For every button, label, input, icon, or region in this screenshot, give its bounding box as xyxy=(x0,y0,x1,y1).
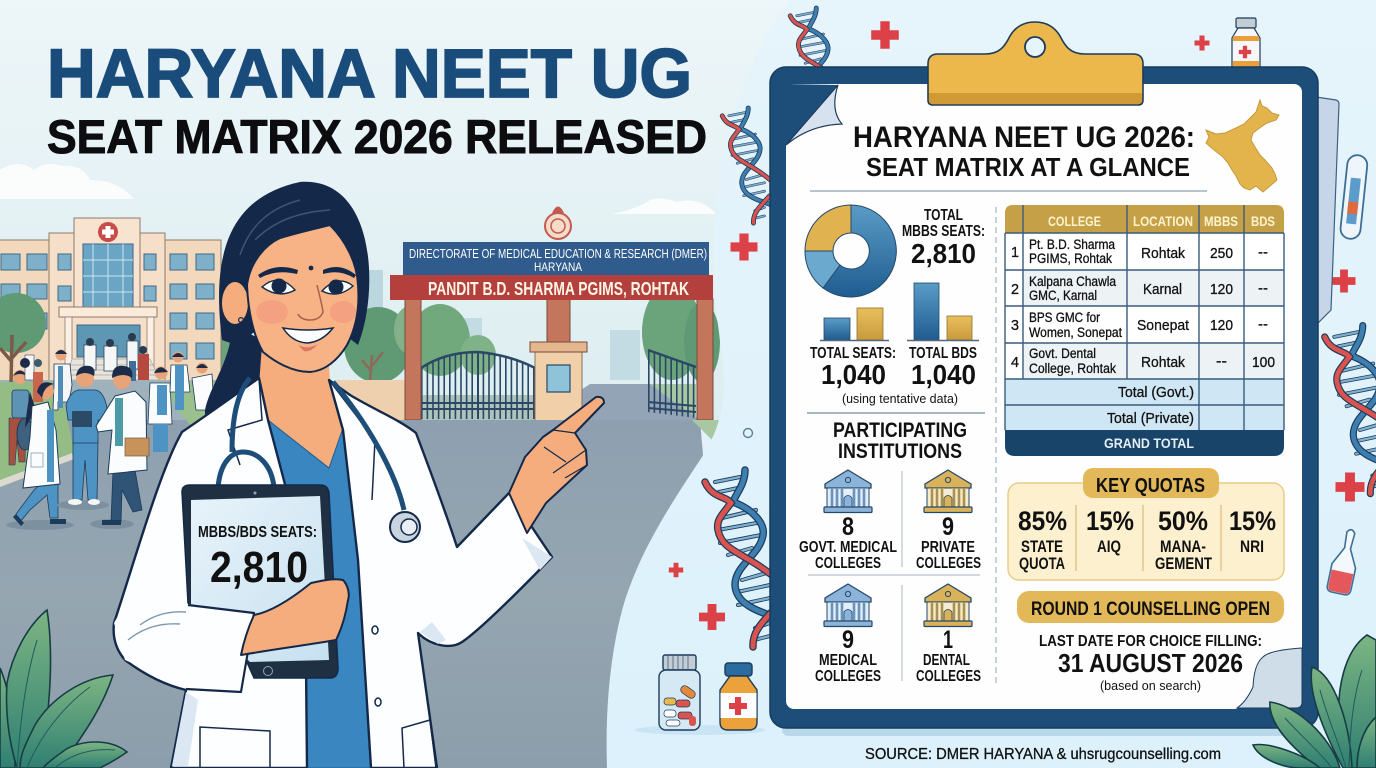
source line: SOURCE: DMER HARYANA & uhsrugcounselling.com xyxy=(865,746,1221,763)
decorative DNA strands xyxy=(705,8,1376,647)
row 3: Women, Sonepat xyxy=(1029,325,1122,340)
hair xyxy=(219,182,369,345)
icon: emblem xyxy=(545,206,571,239)
seat matrix table xyxy=(1005,205,1284,456)
bar chart: total BDS xyxy=(907,283,979,340)
row 4 xyxy=(1011,346,1275,376)
pointing hand xyxy=(509,397,604,533)
background trees and distant buildings xyxy=(200,270,720,383)
row 1: PGIMS, Rohtak xyxy=(1029,251,1112,266)
clipboard panel xyxy=(770,22,1339,736)
item: dental colleges xyxy=(916,584,981,685)
item: private colleges: COLLEGES xyxy=(916,555,981,572)
quota: NRI: NRI xyxy=(1240,537,1264,556)
lawn and tree xyxy=(0,293,46,385)
quota: management: 50% xyxy=(1158,506,1208,536)
row 4: 4 xyxy=(1011,354,1019,371)
grass strips xyxy=(0,382,726,487)
stat: total MBBS seats: MBBS SEATS: xyxy=(902,223,985,240)
last date xyxy=(1039,633,1262,693)
doctor character xyxy=(114,182,604,768)
table header: BDS xyxy=(1251,213,1275,229)
tentative note: (using tentative data) xyxy=(842,392,958,406)
sign: institute xyxy=(390,275,713,300)
left sleeve over tablet xyxy=(114,560,254,692)
row 3: Sonepat xyxy=(1137,317,1190,334)
row 2: Karnal xyxy=(1143,281,1182,298)
quotas heading xyxy=(1083,468,1219,498)
neck and chest xyxy=(259,345,345,470)
icon: medicine bottle xyxy=(720,663,757,730)
background student left xyxy=(9,355,43,465)
row 3: -- xyxy=(1258,316,1268,333)
quota: NRI xyxy=(1229,506,1276,556)
cheeks xyxy=(256,300,356,324)
item: private colleges: PRIVATE xyxy=(921,539,975,556)
row 1: 1 xyxy=(1011,244,1019,261)
background doctor xyxy=(53,350,72,410)
row 1: Rohtak xyxy=(1141,245,1185,262)
quota: management: MANA- xyxy=(1160,537,1206,556)
title line 2: SEAT MATRIX 2026 RELEASED xyxy=(47,110,707,163)
pillars xyxy=(405,299,713,420)
left hand xyxy=(241,579,349,655)
background group right xyxy=(148,352,214,452)
crowd of medical students xyxy=(6,333,214,530)
eyes and brows xyxy=(258,266,356,294)
item: private colleges: 9 xyxy=(942,513,954,541)
table backgrounds xyxy=(1005,205,1284,456)
extra sheet behind board xyxy=(1316,97,1339,325)
sky background xyxy=(0,0,1376,430)
last date: (based on search) xyxy=(1100,679,1201,693)
smile xyxy=(283,328,333,351)
bar chart: total seats xyxy=(820,308,889,340)
row 3: 3 xyxy=(1011,317,1019,334)
row 4: Govt. Dental xyxy=(1029,346,1096,361)
row 2: -- xyxy=(1258,280,1268,297)
participating institutions xyxy=(799,419,981,685)
woman with phone xyxy=(6,382,74,530)
clouds xyxy=(0,164,716,214)
panel heading: SEAT MATRIX AT A GLANCE xyxy=(866,152,1190,182)
totals: GRAND TOTAL xyxy=(1104,435,1194,451)
row 1: Pt. B.D. Sharma xyxy=(1029,237,1115,252)
quota: state xyxy=(1018,506,1067,573)
stat: total seats: TOTAL SEATS: xyxy=(810,345,896,362)
figures on the steps xyxy=(84,333,149,381)
row 2: Kalpana Chawla xyxy=(1029,274,1116,289)
icon: Haryana map xyxy=(1206,100,1279,192)
item: government medical colleges xyxy=(799,470,897,572)
tablet number: 2,810 xyxy=(210,543,308,592)
red crosses xyxy=(669,21,1364,630)
ponytail xyxy=(205,325,264,421)
sign: institute: PANDIT B.D. SHARMA PGIMS, ROHTAK xyxy=(428,279,689,299)
institutions heading xyxy=(833,419,967,463)
road ground xyxy=(0,420,730,768)
paper sheet xyxy=(786,84,1302,709)
counselling banner xyxy=(1017,591,1284,623)
title line 1: HARYANA NEET UG xyxy=(47,35,692,112)
gate with signboard xyxy=(335,206,713,421)
shadow under board xyxy=(782,724,1302,736)
page curl: top left xyxy=(786,84,842,145)
tablet xyxy=(182,485,338,678)
plant: bottom left xyxy=(0,610,127,768)
totals xyxy=(1104,385,1194,451)
row 2 xyxy=(1011,274,1268,303)
institutions heading: PARTICIPATING xyxy=(833,419,967,442)
stat: total BDS: TOTAL BDS xyxy=(909,345,977,362)
donut chart xyxy=(805,205,896,297)
stethoscope xyxy=(218,378,420,542)
guard post xyxy=(530,342,587,421)
gold clip xyxy=(928,22,1143,105)
table header: COLLEGE xyxy=(1048,213,1101,229)
row 3: 120 xyxy=(1210,317,1233,334)
quota: state: STATE xyxy=(1021,537,1063,556)
icon: hospital cross xyxy=(98,222,118,242)
decorative blue curved panel xyxy=(607,0,1376,768)
row 2: GMC, Karnal xyxy=(1029,288,1097,303)
last date: LAST DATE FOR CHOICE FILLING: xyxy=(1039,633,1262,650)
stat: total seats xyxy=(810,345,896,390)
stat: total MBBS seats: TOTAL xyxy=(924,207,963,224)
row 1 xyxy=(1011,237,1268,266)
title xyxy=(47,35,707,163)
nose xyxy=(298,285,323,320)
item: dental colleges: COLLEGES xyxy=(916,668,981,685)
item: medical colleges xyxy=(815,584,881,685)
item: government medical colleges: 8 xyxy=(842,513,854,541)
icon: pill bottle xyxy=(635,655,765,735)
gate: left leaf xyxy=(421,352,536,419)
plant: bottom right xyxy=(1253,635,1376,768)
stat: total seats: 1,040 xyxy=(821,359,886,390)
doctor with folder xyxy=(90,366,149,529)
row 4: 100 xyxy=(1252,354,1275,371)
road beyond the gate xyxy=(421,384,700,420)
quota: state: 85% xyxy=(1018,506,1067,536)
table header xyxy=(1048,213,1275,229)
stat: total MBBS seats xyxy=(902,207,985,269)
quota: management xyxy=(1155,506,1212,573)
hospital building xyxy=(0,218,225,420)
stat: total MBBS seats: 2,810 xyxy=(911,238,976,269)
coat left panel xyxy=(114,378,307,768)
quotas heading: KEY QUOTAS xyxy=(1096,475,1205,497)
quota: AIQ: 15% xyxy=(1086,506,1134,536)
row 1: 250 xyxy=(1210,245,1233,262)
row 4: College, Rohtak xyxy=(1029,361,1116,376)
lapels and pockets xyxy=(200,378,436,768)
item: medical colleges: COLLEGES xyxy=(815,668,881,685)
institutions heading: INSTITUTIONS xyxy=(838,440,962,463)
ear xyxy=(221,281,249,325)
row 4: Rohtak xyxy=(1141,354,1185,371)
tablet label: MBBS/BDS SEATS: xyxy=(198,524,317,541)
sign: directorate: HARYANA xyxy=(534,260,582,274)
quota: management: GEMENT xyxy=(1155,554,1212,573)
scrub top xyxy=(268,420,372,768)
icon: ampoule xyxy=(1326,527,1363,596)
quota: NRI: 15% xyxy=(1229,506,1276,536)
white coat xyxy=(114,378,552,768)
item: dental colleges: 1 xyxy=(943,626,953,654)
row 2: 120 xyxy=(1210,281,1233,298)
row 4: -- xyxy=(1216,353,1227,370)
student in scrubs xyxy=(57,366,109,510)
icon: test tube xyxy=(1340,154,1368,240)
table header: LOCATION xyxy=(1133,213,1193,229)
stat: total BDS: 1,040 xyxy=(911,359,976,390)
row 1: -- xyxy=(1258,244,1268,261)
quota: AIQ: AIQ xyxy=(1097,537,1121,556)
coat right panel xyxy=(329,380,552,768)
key quotas panel xyxy=(1008,468,1284,580)
row 2: 2 xyxy=(1011,281,1019,298)
icon: top vial xyxy=(1232,18,1260,67)
page curl: bottom right xyxy=(1237,648,1302,709)
gate: right leaf xyxy=(648,385,697,412)
item: dental colleges: DENTAL xyxy=(923,652,970,669)
quota: state: QUOTA xyxy=(1019,554,1065,573)
panel heading: HARYANA NEET UG 2026: xyxy=(853,121,1195,154)
counselling banner: ROUND 1 COUNSELLING OPEN xyxy=(1031,599,1270,620)
panel heading xyxy=(853,121,1195,182)
item: government medical colleges: GOVT. MEDICAL xyxy=(799,539,897,556)
perimeter wall xyxy=(335,380,405,420)
totals: Total (Govt.) xyxy=(1118,385,1194,401)
item: private colleges xyxy=(916,470,981,572)
stat: total BDS xyxy=(909,345,977,390)
quota: AIQ xyxy=(1086,506,1134,556)
coat shading xyxy=(126,538,552,766)
row 3 xyxy=(1011,310,1268,340)
row 3: BPS GMC for xyxy=(1029,310,1100,325)
last date: 31 AUGUST 2026 xyxy=(1058,648,1243,678)
item: government medical colleges: COLLEGES xyxy=(815,555,881,572)
sign: directorate: DIRECTORATE OF MEDICAL EDUCATION & RESEARCH (DMER) xyxy=(409,246,707,261)
item: medical colleges: MEDICAL xyxy=(819,652,877,669)
board xyxy=(770,67,1318,728)
table header: MBBS xyxy=(1204,213,1238,229)
item: medical colleges: 9 xyxy=(842,626,854,654)
sign: directorate xyxy=(403,242,709,275)
face xyxy=(247,225,358,372)
totals: Total (Private) xyxy=(1107,411,1194,427)
